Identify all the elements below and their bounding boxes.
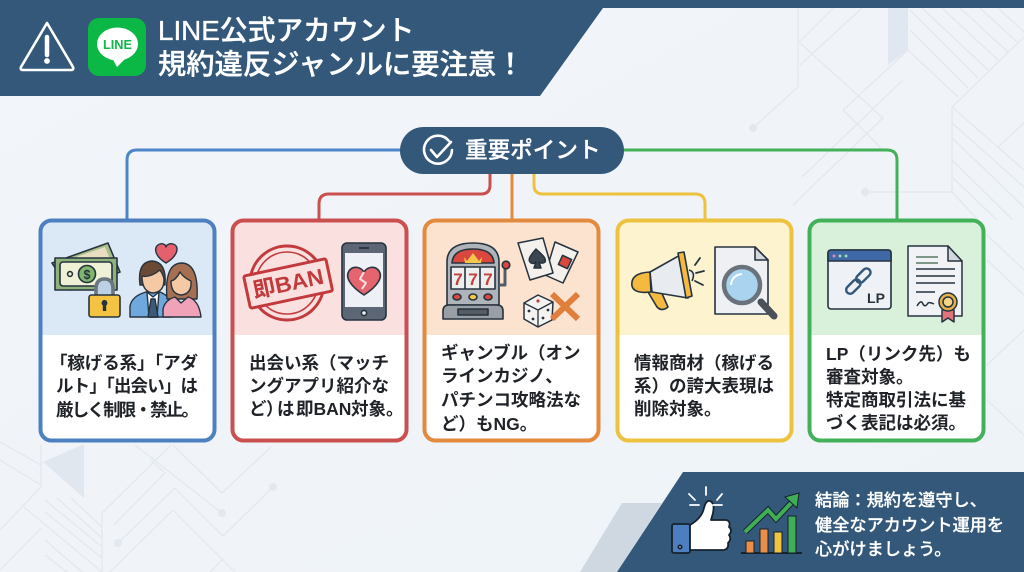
icon: money and lock xyxy=(52,243,120,317)
title: 規約違反ジャンルに要注意！ xyxy=(158,48,524,80)
title: LINE公式アカウント xyxy=(158,15,414,46)
panel: blue card xyxy=(40,220,214,440)
icon: certificate document xyxy=(908,246,962,322)
icon: LINE logo xyxy=(88,18,146,76)
card text: ギャンブル（オン xyxy=(441,343,580,363)
card text xyxy=(441,343,581,434)
icon: growth chart xyxy=(741,493,802,553)
icon: phone with broken heart xyxy=(342,243,386,320)
card text: 削除対象。 xyxy=(634,399,722,419)
card text: 審査対象。 xyxy=(826,367,914,387)
icon: playing cards xyxy=(518,238,578,283)
conclusion text: 健全なアカウント運用を xyxy=(815,515,1004,535)
card text: 特定商取引法に基 xyxy=(826,390,966,410)
icon: slot machine: 7 xyxy=(468,270,478,289)
title xyxy=(158,15,524,80)
icon: check circle xyxy=(424,136,452,164)
card text: LP（リンク先）も xyxy=(826,344,971,364)
connector lines xyxy=(127,150,897,220)
card text: 即BAN xyxy=(296,399,351,419)
panel: orange card xyxy=(424,220,598,440)
icon: instant BAN stamp xyxy=(244,246,333,320)
card text: ど xyxy=(249,399,267,419)
conclusion text: 心がけましょう。 xyxy=(815,539,951,559)
card text xyxy=(826,344,971,433)
card text: ングアプリ紹介な xyxy=(249,376,389,396)
icon: thumbs up xyxy=(672,487,731,553)
icon: slot machine: 7 xyxy=(483,270,493,289)
card text: ） xyxy=(266,399,284,419)
key point pill: 重要ポイント xyxy=(465,138,601,163)
card text: 厳しく制限・禁止。 xyxy=(56,400,199,420)
card text: パチンコ攻略法な xyxy=(441,390,581,410)
card text: 情報商材（稼げる xyxy=(634,353,774,373)
card text: 出会い系（マッチ xyxy=(249,353,389,373)
icon: browser with link xyxy=(828,250,891,309)
conclusion panel xyxy=(617,472,1024,572)
panel: green card xyxy=(810,220,984,440)
panel: red card xyxy=(232,220,406,440)
card text xyxy=(50,353,199,420)
card text: ど）もNG。 xyxy=(441,414,537,434)
icon: megaphone xyxy=(632,252,704,310)
card text: ルト」「出会い」は xyxy=(56,376,198,396)
icon: couple with heart xyxy=(130,244,201,317)
card text: 系）の誇大表現は xyxy=(634,376,774,396)
key point pill xyxy=(400,127,624,174)
card text: 「稼げる系」「アダ xyxy=(50,353,198,373)
card text xyxy=(634,353,774,419)
icon: browser with link: LP xyxy=(867,290,885,306)
card text: ラインカジノ、 xyxy=(441,366,563,386)
icon: dice with cross xyxy=(524,294,578,327)
icon: document and magnifier xyxy=(715,247,774,316)
card text: 対象。 xyxy=(351,399,404,419)
icon: LINE logo: LINE xyxy=(103,37,132,52)
panel: yellow card xyxy=(618,220,792,440)
icon: slot machine: 7 xyxy=(453,270,463,289)
icon: instant BAN stamp: 即BAN xyxy=(250,264,326,303)
header banner xyxy=(0,0,1024,96)
card text: は xyxy=(277,399,294,419)
conclusion text xyxy=(815,490,1004,559)
card text: づく表記は必須。 xyxy=(826,413,966,433)
conclusion text: 結論：規約を遵守し、 xyxy=(815,490,987,510)
icon: money and lock: $ xyxy=(84,268,91,282)
icon: slot machine xyxy=(443,243,510,319)
icon: warning triangle xyxy=(21,23,73,70)
card text xyxy=(249,353,404,419)
